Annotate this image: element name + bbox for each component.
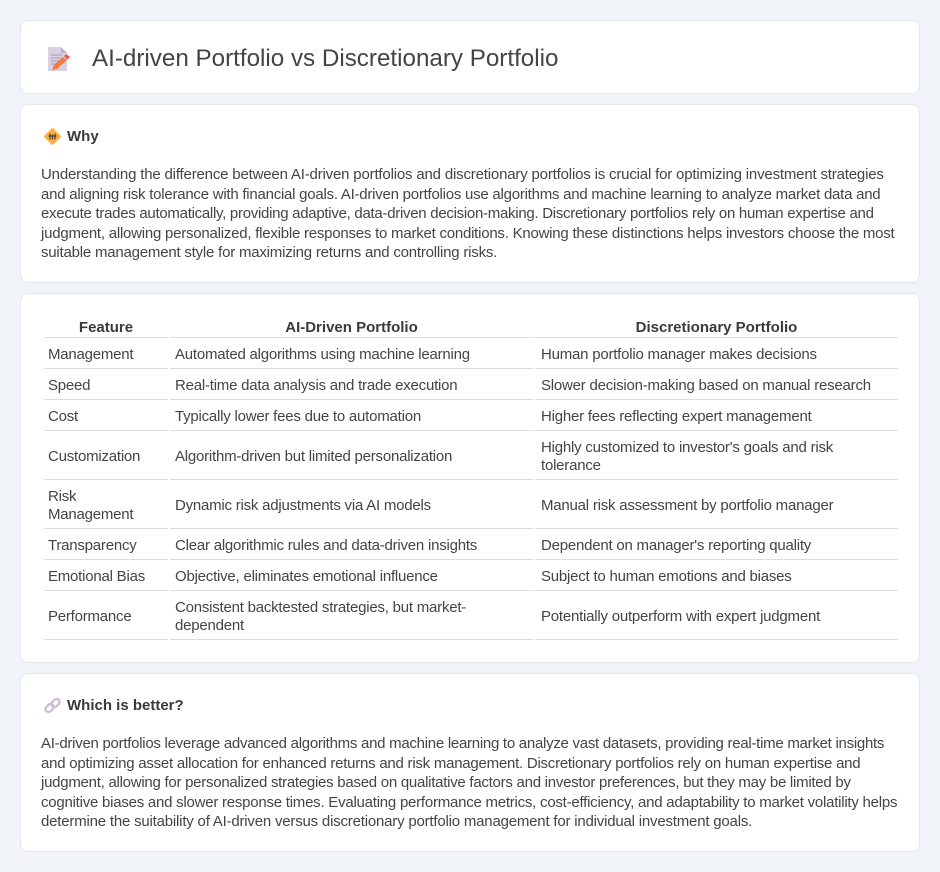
icon: warning diamond	[44, 128, 61, 145]
panel: comparison table	[20, 293, 920, 663]
row: risk management: Manual risk assessment by portfolio manager	[541, 497, 833, 514]
row: management: Management	[48, 346, 133, 363]
row: performance: Performance	[48, 608, 131, 625]
row: transparency	[48, 537, 812, 554]
row: customization	[48, 439, 834, 474]
row: management: Human portfolio manager makes decisions	[541, 346, 817, 363]
table header: Feature	[79, 319, 133, 336]
heading: why: Why	[67, 128, 99, 145]
panel: title header	[20, 20, 920, 94]
table header: AI-Driven Portfolio	[285, 319, 418, 336]
title: AI-driven Portfolio vs Discretionary Portfolio	[92, 45, 558, 72]
text block: why: and aligning risk tolerance with financial goals. AI-driven portfolios use algorithms and machine learning to analyze market data and	[41, 186, 880, 203]
text block: which is better: determine the suitability of AI-driven versus discretionary portfolio management for individual investment goals.	[41, 813, 752, 830]
row: performance	[48, 599, 820, 634]
row: emotional bias: Objective, eliminates emotional influence	[175, 568, 438, 585]
table header: Discretionary Portfolio	[636, 319, 797, 336]
panel: which is better	[20, 673, 920, 852]
row: customization: tolerance	[541, 457, 601, 474]
row: customization: Highly customized to investor's goals and risk	[541, 439, 833, 456]
icon: chain link	[44, 698, 61, 714]
row: cost: Higher fees reflecting expert management	[541, 408, 812, 425]
text block: which is better: judgment, allowing for personalized strategies based on qualitative factors and investor preferences, but they may be limited by	[41, 774, 851, 791]
row: emotional bias: Emotional Bias	[48, 568, 145, 585]
row: risk management: Management	[48, 506, 133, 523]
row: emotional bias	[48, 568, 792, 585]
row: cost: Cost	[48, 408, 78, 425]
text block: which is better	[40, 735, 897, 830]
row: transparency: Clear algorithmic rules and data-driven insights	[175, 537, 477, 554]
row: management	[48, 346, 817, 363]
icon: document with pencil	[48, 47, 70, 71]
row: transparency: Transparency	[48, 537, 137, 554]
text block: why: execute trades automatically, providing adaptive, data-driven decision-making. Discretionary portfolios rely on human expertise and	[41, 205, 874, 222]
row: performance: dependent	[175, 617, 244, 634]
row: speed	[48, 377, 871, 394]
text block: why	[40, 166, 895, 261]
table header	[79, 319, 797, 336]
row: customization: Customization	[48, 448, 140, 465]
text block: which is better: AI-driven portfolios leverage advanced algorithms and machine learning to analyze vast datasets, providing real-time market insights	[41, 735, 884, 752]
row: risk management: Risk	[48, 488, 76, 505]
row: risk management	[48, 488, 834, 523]
row: customization: Algorithm-driven but limited personalization	[175, 448, 452, 465]
row: risk management: Dynamic risk adjustments via AI models	[175, 497, 431, 514]
row: transparency: Dependent on manager's reporting quality	[541, 537, 811, 554]
row: cost	[48, 408, 812, 425]
row: performance: Potentially outperform with expert judgment	[541, 608, 820, 625]
text block: which is better: and optimizing asset allocation for enhanced returns and risk management. Discretionary portfolios rely on human expertise and	[41, 755, 860, 772]
text block: why: judgment, allowing personalized, flexible responses to market conditions. Knowing these distinctions helps investors choose the most	[41, 225, 894, 242]
row: management: Automated algorithms using machine learning	[175, 346, 470, 363]
row: speed: Slower decision-making based on manual research	[541, 377, 871, 394]
text block: why: Understanding the difference between AI-driven portfolios and discretionary portfolios is crucial for optimizing investment strategies	[41, 166, 884, 183]
text block: which is better: cognitive biases and slower response times. Evaluating performance metrics, cost-efficiency, and adaptability to market volatility helps	[41, 794, 897, 811]
row: performance: Consistent backtested strategies, but market-	[175, 599, 466, 616]
row: cost: Typically lower fees due to automation	[175, 408, 421, 425]
text block: why: suitable management style for maximizing returns and controlling risks.	[41, 244, 497, 261]
row: speed: Real-time data analysis and trade execution	[175, 377, 457, 394]
heading: which is better: Which is better?	[67, 697, 184, 714]
panel: why	[20, 104, 920, 283]
row: emotional bias: Subject to human emotions and biases	[541, 568, 792, 585]
row: speed: Speed	[48, 377, 90, 394]
